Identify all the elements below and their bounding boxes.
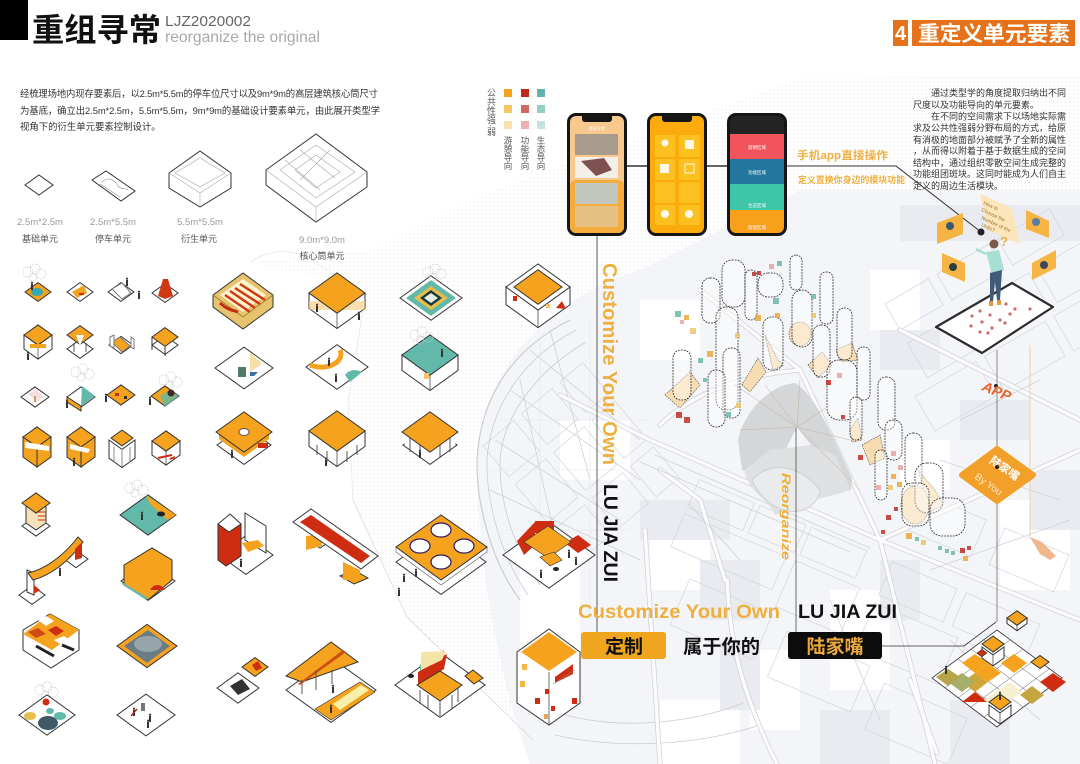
intro text bbox=[20, 88, 380, 132]
description text: 结构中，通过组织零散空间生成完整的 bbox=[913, 157, 1066, 168]
four circles canopy bbox=[396, 515, 487, 596]
pointer dot bbox=[978, 228, 984, 236]
rotated label: reorganize: Reorganize bbox=[779, 473, 793, 560]
description text: 在不同的空间需求下以场地实际需 bbox=[931, 110, 1066, 122]
teal tile with canopy bbox=[120, 480, 176, 535]
description text: 功能组团斑块。这同时能成为人们自主 bbox=[913, 168, 1066, 179]
description text: 尺度以及功能导向的单元要素。 bbox=[913, 99, 1039, 110]
section heading: 4 bbox=[895, 23, 907, 45]
slogan buttons: 属于你的 bbox=[683, 636, 760, 658]
checker roof box bbox=[23, 614, 79, 668]
map: coloured program squares bbox=[675, 261, 971, 561]
garden tile bbox=[215, 347, 273, 389]
white cube bbox=[506, 264, 570, 328]
section heading: 重定义单元要素 bbox=[918, 22, 1070, 46]
courtyard house bbox=[395, 650, 485, 717]
vertical slogan: Customize Your Own bbox=[598, 263, 620, 465]
legend: orientation colour matrix: 生态导向 bbox=[536, 135, 546, 170]
description text: ，从而得以附着于基于数据生成的空间 bbox=[913, 145, 1066, 156]
horizontal slogan: LU JIA ZUI bbox=[798, 602, 897, 623]
orange badge: by you: By You bbox=[972, 471, 1004, 498]
stacked blocks bbox=[945, 611, 1049, 724]
illustration: person on isometric phone bbox=[936, 194, 1056, 353]
glazed box bbox=[309, 411, 365, 467]
map: grey central plaza bbox=[738, 383, 852, 515]
title block: LJZ2020002 bbox=[165, 13, 251, 30]
description text: 求及公共性强弱分野布局的方式，给原 bbox=[913, 122, 1066, 133]
unit: base unit: 基础单元 bbox=[22, 233, 58, 244]
slat theatre box bbox=[213, 273, 273, 329]
intro text: 视角下的衍生单元要素控制设计。 bbox=[20, 121, 161, 132]
map: orange development blobs bbox=[665, 322, 943, 524]
isometric checker composite bbox=[932, 611, 1066, 727]
red tower with stair bbox=[218, 513, 273, 574]
unit: parking unit bbox=[90, 171, 136, 244]
unit: derived unit: 5.5m*5.5m bbox=[177, 217, 223, 228]
legend: orientation colour matrix: 公共性强·弱 bbox=[486, 88, 496, 137]
third block of isometric units bbox=[19, 480, 177, 736]
slogan buttons: 陆家嘴 bbox=[806, 635, 864, 658]
unit: derived unit: 衍生单元 bbox=[181, 233, 217, 244]
description text: 定义的周边生活模块。 bbox=[913, 180, 1003, 191]
unit: core tube unit bbox=[266, 134, 367, 261]
unit: base unit: 2.5m*2.5m bbox=[17, 217, 63, 228]
map: radial fan lines from the plaza bbox=[735, 380, 860, 490]
market roofs bbox=[503, 521, 595, 588]
car tile bbox=[217, 658, 268, 703]
small tower bbox=[22, 493, 50, 536]
row 3 bbox=[21, 364, 182, 411]
description text: 通过类型学的角度提取归纳出不同 bbox=[931, 87, 1066, 98]
unit: parking unit: 2.5m*5.5m bbox=[90, 217, 136, 228]
slogan buttons: 定制 bbox=[605, 635, 643, 658]
phone 3: coloured category screen: 生态区域 bbox=[748, 202, 766, 208]
app callouts: 手机app直接操作 bbox=[797, 148, 888, 162]
roofed box bbox=[309, 273, 365, 329]
app callouts bbox=[797, 148, 905, 185]
title block: reorganize the original bbox=[165, 29, 320, 46]
small isometric unit grid bbox=[21, 264, 182, 468]
pool tile bbox=[400, 264, 462, 320]
canopy with oculus bbox=[216, 412, 272, 464]
title block: 重组寻常 bbox=[32, 12, 161, 48]
long bench bbox=[293, 509, 378, 584]
speech note: Choose the bbox=[980, 207, 1006, 224]
legend: orientation colour matrix: 功能导向 bbox=[520, 135, 530, 170]
legend: orientation colour matrix: 游憩导向 bbox=[503, 135, 513, 170]
description text bbox=[913, 87, 1068, 191]
icon: pointing hand bbox=[1030, 537, 1056, 560]
map: roads bbox=[560, 290, 1080, 764]
map: pale city base bbox=[477, 190, 1080, 764]
second block of isometric units bbox=[213, 264, 570, 467]
unit: core tube unit: 核心筒单元 bbox=[299, 250, 345, 261]
phone 3: coloured category screen: 游憩区域 bbox=[748, 144, 766, 151]
panel: video avatars bbox=[937, 210, 1056, 282]
vertical slogan: LU JIA ZUI bbox=[599, 484, 620, 582]
intro text: 为基底，确立出2.5m*2.5m，5.5m*5.5m，9m*9m的基础设计要素单元，由此展开类型学 bbox=[20, 105, 380, 116]
background: stippled site dome bbox=[250, 76, 1080, 764]
orange shed bbox=[121, 548, 175, 600]
phone 1: photo gallery screen bbox=[567, 113, 627, 236]
speech note: ? bbox=[1000, 234, 1008, 249]
phone 3: coloured category screen: 街面区域 bbox=[748, 224, 766, 231]
parking canopy bbox=[286, 642, 376, 722]
fourth block of isometric units bbox=[217, 509, 595, 725]
isometric phone bbox=[936, 283, 1053, 353]
row 1 bbox=[23, 264, 178, 302]
phone 3: coloured category screen bbox=[727, 113, 787, 236]
vertical slogan bbox=[598, 263, 620, 582]
description text: 有消极的地面部分被赋予了全新的属性 bbox=[913, 134, 1066, 145]
app callouts: 定义置换你身边的模块功能 bbox=[798, 174, 905, 185]
slogan buttons bbox=[581, 632, 882, 659]
checker cells bbox=[936, 654, 1066, 708]
arch bbox=[19, 537, 88, 604]
circles tile bbox=[19, 682, 75, 735]
legend: orientation colour matrix bbox=[486, 88, 546, 170]
unit: parking unit: 停车单元 bbox=[95, 233, 131, 244]
dark pool tile bbox=[117, 624, 177, 668]
map: dashed high-rise footprints bbox=[673, 255, 965, 536]
white red-windowed tower bbox=[517, 629, 580, 725]
horizontal slogan bbox=[578, 602, 897, 623]
orange badge: by you bbox=[962, 449, 1033, 501]
orange badge: by you: 陆家嘴 bbox=[987, 453, 1022, 483]
speech note bbox=[980, 194, 1020, 249]
people tile bbox=[117, 694, 175, 736]
person bbox=[976, 240, 1004, 306]
map: connector lines bbox=[597, 166, 1030, 646]
curved path tile bbox=[306, 345, 368, 389]
phone 2: function menu screen bbox=[647, 113, 707, 236]
map: ring of city blocks bbox=[250, 252, 760, 744]
unit: core tube unit: 9.0m*9.0m bbox=[299, 235, 345, 246]
phone 3: coloured category screen: 功能区域 bbox=[748, 169, 766, 176]
row 4 bbox=[23, 427, 180, 468]
intro text: 经梳理场地内现存要素后，以2.5m*5.5m的停车位尺寸以及9m*9m的高层建筑核心筒尺寸 bbox=[20, 88, 378, 99]
row 2 bbox=[24, 325, 178, 360]
speech note: Number of the bbox=[980, 215, 1012, 234]
horizontal slogan: Customize Your Own bbox=[578, 602, 780, 623]
unit: derived unit bbox=[169, 151, 231, 244]
speech note: Units? bbox=[980, 222, 996, 234]
map: fine street blocks bbox=[483, 204, 1080, 764]
app tag: APP bbox=[979, 378, 1014, 404]
phone 1: photo gallery screen: 重组寻常 bbox=[589, 125, 605, 131]
speech note: How to bbox=[982, 200, 999, 212]
pavilion bbox=[402, 412, 458, 464]
title block bbox=[0, 0, 320, 48]
teal roof box bbox=[402, 327, 458, 391]
unit: base unit bbox=[17, 175, 63, 244]
